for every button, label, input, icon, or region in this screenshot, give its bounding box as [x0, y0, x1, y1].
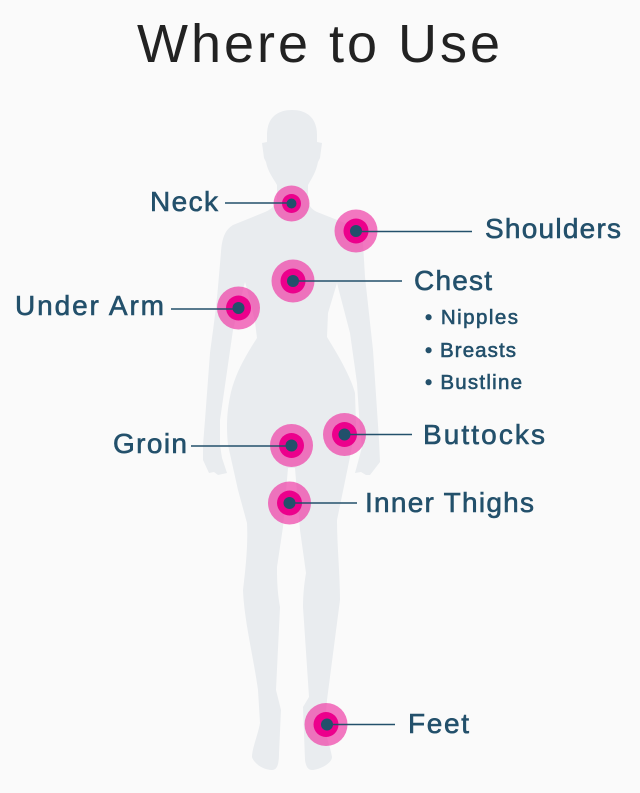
marker: chest [272, 260, 402, 302]
label: Neck: Neck [150, 186, 219, 217]
marker: inner thighs [268, 482, 357, 524]
marker: under arm [171, 286, 260, 330]
marker: groin [191, 424, 313, 467]
label: Shoulders: Shoulders [485, 213, 621, 244]
label: Feet: Feet [408, 708, 469, 739]
label: Chest: Chest [414, 265, 492, 296]
list: chest areas: • Nipples [425, 306, 518, 329]
label: Groin: Groin [113, 428, 187, 459]
marker: shoulders [334, 210, 472, 252]
label: Buttocks: Buttocks [423, 419, 545, 450]
list: chest areas: • Breasts [425, 339, 516, 362]
list: chest areas: • Bustline [425, 371, 522, 394]
body silhouette [203, 110, 380, 770]
label: Inner Thighs: Inner Thighs [365, 487, 534, 518]
list: chest areas [425, 306, 522, 394]
marker: buttocks [323, 413, 412, 456]
label: Under Arm: Under Arm [15, 290, 164, 321]
title: Where to Use [137, 14, 500, 74]
marker: neck [225, 186, 310, 222]
marker: feet [304, 703, 395, 746]
